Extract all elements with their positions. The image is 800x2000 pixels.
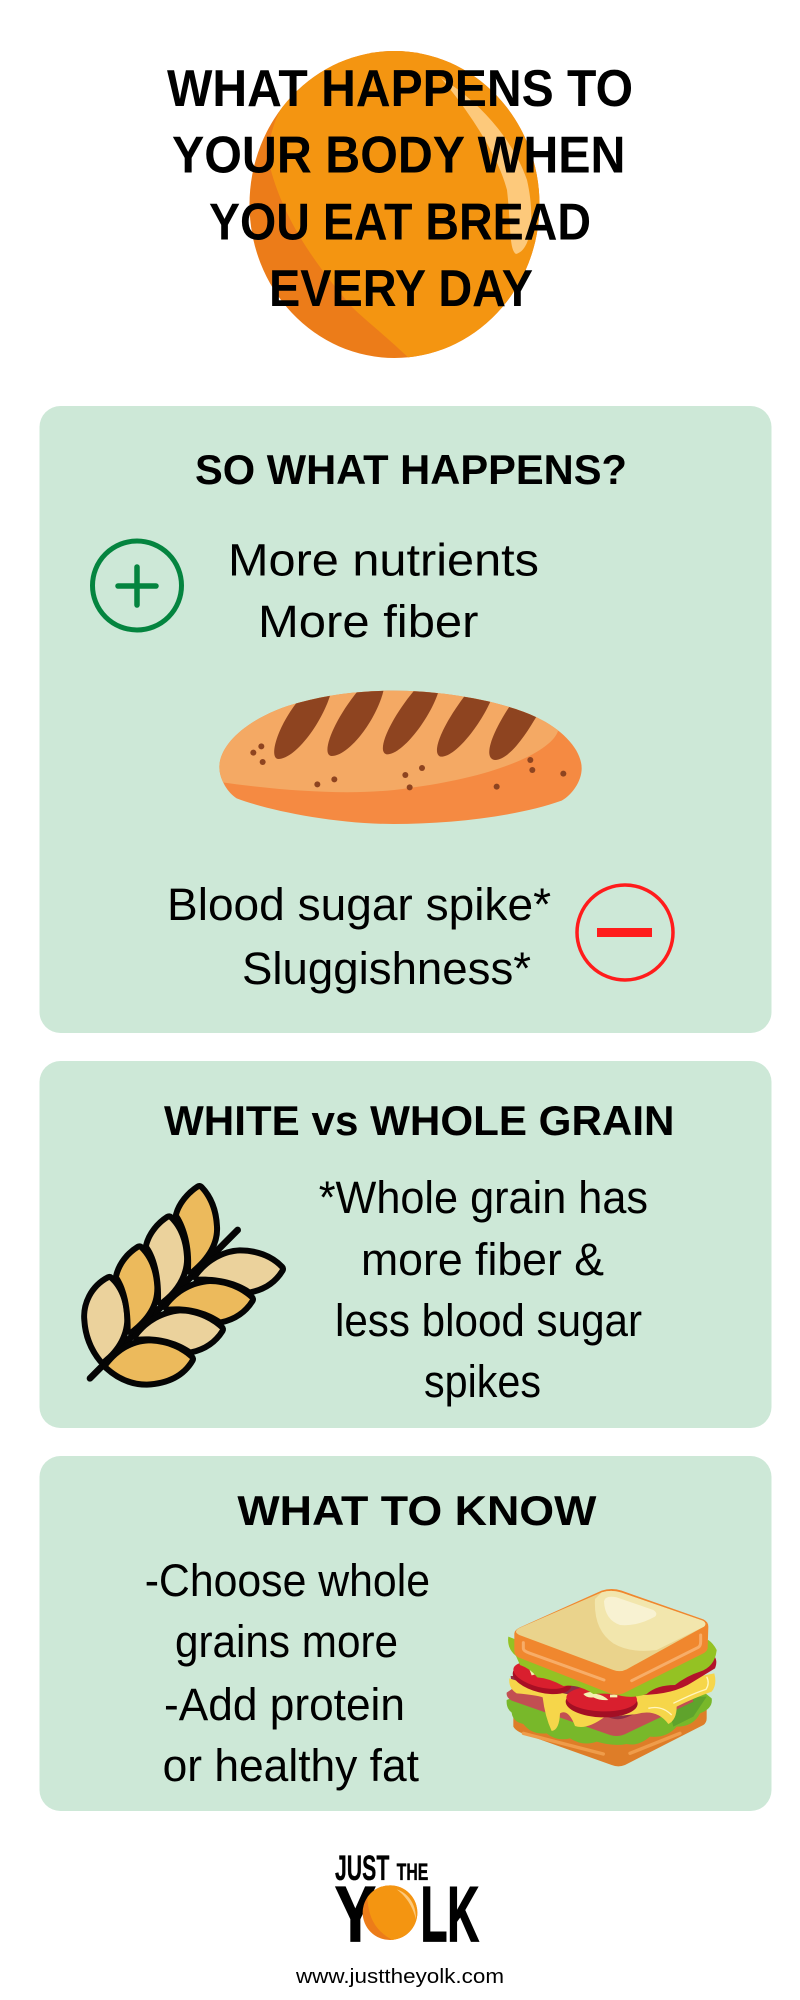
- panel: so what happens: [40, 406, 772, 1033]
- text: downsides: [167, 879, 551, 994]
- website url: www.justtheyolk.com: [295, 1966, 504, 1988]
- text: benefits: More nutrients: [228, 535, 539, 586]
- logo words: LK: [421, 1870, 479, 1958]
- logo: just the yolk: [334, 1855, 480, 1942]
- text: downsides: Blood sugar spike*: [167, 879, 551, 930]
- title: EVERY DAY: [269, 260, 533, 318]
- logo words: THE: [397, 1859, 428, 1886]
- text: whole grain note: more fiber &: [361, 1234, 604, 1285]
- icon: egg yolk behind title: [250, 51, 540, 358]
- logo words: JUST: [335, 1849, 389, 1888]
- icon: wheat: [87, 1189, 280, 1382]
- text: tips: or healthy fat: [163, 1740, 419, 1791]
- text: benefits: [228, 535, 539, 647]
- icon: minus in circle: [577, 885, 673, 980]
- title: YOU EAT BREAD: [209, 193, 591, 251]
- text: whole grain note: spikes: [424, 1356, 541, 1407]
- text: benefits: More fiber: [258, 596, 479, 647]
- text: tips: grains more: [175, 1616, 398, 1667]
- heading: white vs whole grain: WHITE vs WHOLE GRAIN: [164, 1097, 674, 1144]
- text: whole grain note: [319, 1172, 648, 1407]
- logo yolk: [362, 1885, 418, 1940]
- text: tips: -Choose whole: [145, 1555, 430, 1606]
- text: whole grain note: *Whole grain has: [319, 1172, 648, 1223]
- icon: plus in circle: [92, 541, 182, 630]
- text: downsides: Sluggishness*: [242, 943, 531, 994]
- icon: bread loaf: [213, 687, 582, 824]
- logo words: [335, 1849, 479, 1958]
- title: WHAT HAPPENS TO: [167, 60, 633, 118]
- text: tips: [145, 1555, 430, 1791]
- heading: so what happens: SO WHAT HAPPENS?: [195, 446, 627, 493]
- panel: what to know: [40, 1456, 772, 1811]
- title: [167, 60, 633, 318]
- title: YOUR BODY WHEN: [172, 127, 626, 185]
- text: tips: -Add protein: [164, 1679, 405, 1730]
- heading: what to know: WHAT TO KNOW: [237, 1487, 597, 1534]
- text: whole grain note: less blood sugar: [335, 1295, 642, 1346]
- panel: white vs whole grain: [40, 1061, 772, 1428]
- icon: sandwich: [507, 1589, 717, 1766]
- logo words: Y: [335, 1870, 376, 1958]
